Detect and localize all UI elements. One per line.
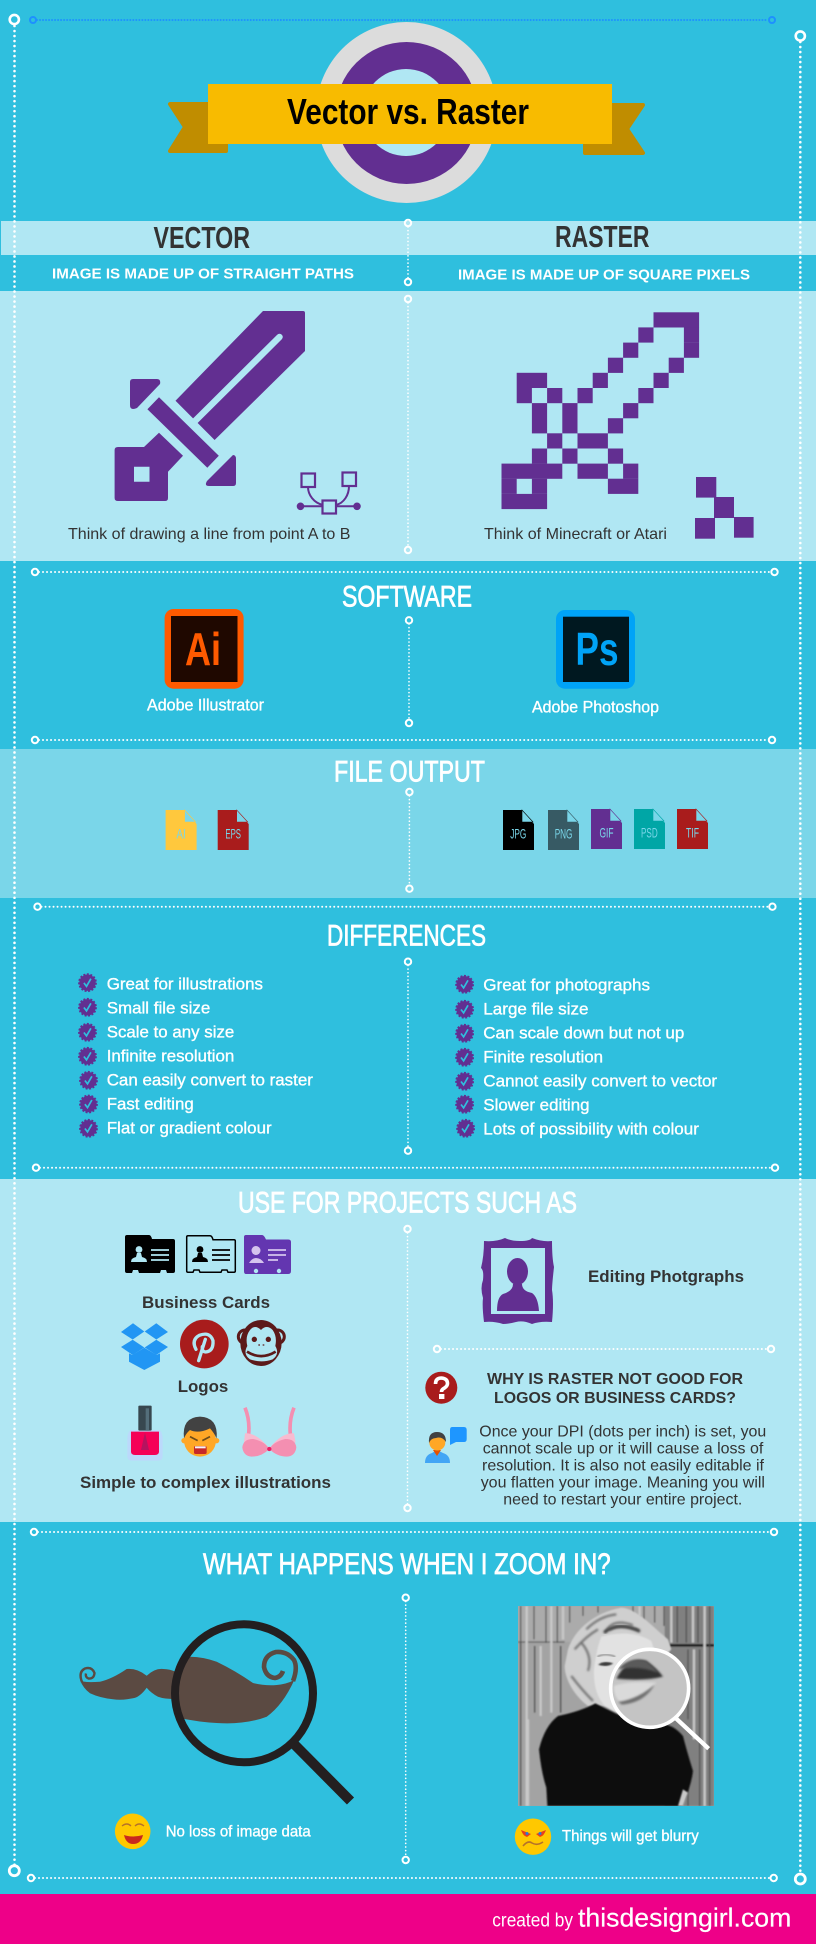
icon: black business card [125, 1235, 175, 1273]
icon: pixels [695, 477, 754, 539]
file icon: AI: AI [176, 826, 186, 842]
icon: nail polish [127, 1406, 163, 1461]
file icon: PNG [548, 810, 579, 850]
icon: photoshop [556, 610, 635, 689]
photo: portrait with magnifier [518, 1606, 714, 1806]
file icon: JPG: JPG [510, 826, 526, 842]
icon: mustache under magnifier [80, 1624, 350, 1801]
credit: created by: created by [492, 1911, 573, 1932]
footer bar [0, 1894, 816, 1944]
magnifying glass [175, 1624, 350, 1801]
file icon: PSD [634, 809, 665, 849]
heading: differences: DIFFERENCES [327, 920, 486, 953]
icon: illustrator: Ai [185, 623, 221, 675]
icon: dropbox logo [121, 1323, 168, 1370]
list: raster differences: Large file size [483, 999, 588, 1018]
file icon: GIF: GIF [600, 825, 614, 841]
label: business cards: Business Cards [142, 1293, 270, 1312]
banner [208, 84, 612, 144]
icon: illustrator [165, 609, 244, 689]
icon: vector sword [115, 311, 305, 501]
explanation paragraph: cannot scale up or it will cause a loss of [483, 1441, 764, 1458]
icon: man speaking [425, 1427, 467, 1463]
icon: outlined business card [187, 1236, 235, 1272]
explanation paragraph [479, 1424, 766, 1509]
list: vector differences: Can easily convert to raster [107, 1070, 313, 1089]
list: vector differences: Small file size [107, 998, 210, 1017]
list: vector differences: Flat or gradient colour [107, 1118, 272, 1137]
heading: file output: FILE OUTPUT [334, 756, 485, 789]
icon: angry boy [181, 1417, 219, 1457]
sweater [539, 1703, 693, 1806]
file icon: EPS: EPS [225, 826, 241, 842]
icon: purple business card [244, 1235, 291, 1274]
list: raster differences: Finite resolution [483, 1047, 603, 1066]
icon: angry emoji [515, 1818, 551, 1855]
list: vector differences [79, 974, 313, 1137]
file icon: PSD: PSD [641, 825, 658, 841]
list: raster differences: Can scale down but not up [483, 1023, 684, 1042]
list: raster differences: Lots of possibility with colour [483, 1119, 699, 1138]
icon: question mark [425, 1372, 457, 1404]
vector caption: Think of drawing a line from point A to B [68, 526, 350, 543]
caption: no loss: No loss of image data [166, 1824, 311, 1841]
wood background [518, 1606, 714, 1806]
face [594, 1634, 654, 1714]
label: illustrator: Adobe Illustrator [147, 697, 264, 715]
label: logos: Logos [178, 1377, 228, 1396]
icon: portrait frame [481, 1238, 554, 1324]
hair strands [571, 1614, 639, 1701]
heading: zoom in: WHAT HAPPENS WHEN I ZOOM IN? [203, 1548, 611, 1581]
enlarged mustache [179, 1650, 298, 1724]
raster subtitle: IMAGE IS MADE UP OF SQUARE PIXELS [458, 266, 750, 284]
icon: bra [242, 1408, 296, 1457]
ribbon tails [170, 104, 643, 153]
explanation paragraph: Once your DPI (dots per inch) is set, you [479, 1424, 766, 1441]
file icon: GIF [591, 809, 622, 849]
list: raster differences: Cannot easily convert to vector [483, 1071, 717, 1090]
question heading: WHY IS RASTER NOT GOOD FOR [487, 1371, 743, 1388]
small mustache [80, 1668, 176, 1700]
magnifying lens [611, 1649, 709, 1749]
question heading: LOGOS OR BUSINESS CARDS? [494, 1390, 736, 1407]
explanation paragraph: you flatten your image. Meaning you will [481, 1475, 765, 1492]
heading: use for projects: USE FOR PROJECTS SUCH AS [238, 1187, 577, 1220]
file icon: TIF [677, 809, 708, 849]
list: vector differences: Infinite resolution [107, 1046, 234, 1065]
icon: bezier path [298, 472, 360, 514]
label: illustrations: Simple to complex illustrations [80, 1474, 331, 1492]
vector subtitle: IMAGE IS MADE UP OF STRAIGHT PATHS [52, 266, 354, 282]
list: raster differences [456, 975, 717, 1138]
file icon: AI [166, 810, 197, 850]
icon: pinterest logo [180, 1320, 229, 1368]
list: raster differences: Great for photographs [483, 975, 650, 994]
title badge [170, 22, 643, 203]
file icon: PNG: PNG [555, 826, 572, 842]
file icon: JPG [503, 810, 534, 850]
list: vector differences: Fast editing [107, 1094, 194, 1113]
heading: software: SOFTWARE [342, 581, 472, 614]
title: Vector vs. Raster [287, 91, 529, 132]
icon: raster sword [502, 312, 699, 509]
column heading: vector: VECTOR [154, 221, 250, 255]
list: vector differences: Scale to any size [107, 1022, 234, 1041]
explanation paragraph: resolution. It is also not easily editable if [482, 1458, 765, 1475]
explanation paragraph: need to restart your entire project. [503, 1492, 742, 1509]
column heading: raster: RASTER [555, 220, 650, 254]
label: photoshop: Adobe Photoshop [532, 699, 659, 717]
hair [565, 1608, 671, 1706]
list: vector differences: Great for illustrations [107, 974, 263, 993]
icon: photoshop: Ps [576, 623, 618, 675]
file icon: EPS [218, 810, 249, 850]
credit: website: thisdesigngirl.com [578, 1902, 791, 1932]
badge rings [316, 22, 497, 203]
question heading [487, 1371, 743, 1407]
icon: monkey logo [238, 1320, 284, 1366]
raster caption: Think of Minecraft or Atari [484, 526, 667, 543]
caption: blurry: Things will get blurry [562, 1828, 699, 1845]
file icon: TIF: TIF [686, 825, 699, 841]
icon: happy emoji [115, 1814, 150, 1849]
list: raster differences: Slower editing [483, 1095, 590, 1114]
label: editing photographs: Editing Photgraphs [588, 1267, 744, 1286]
